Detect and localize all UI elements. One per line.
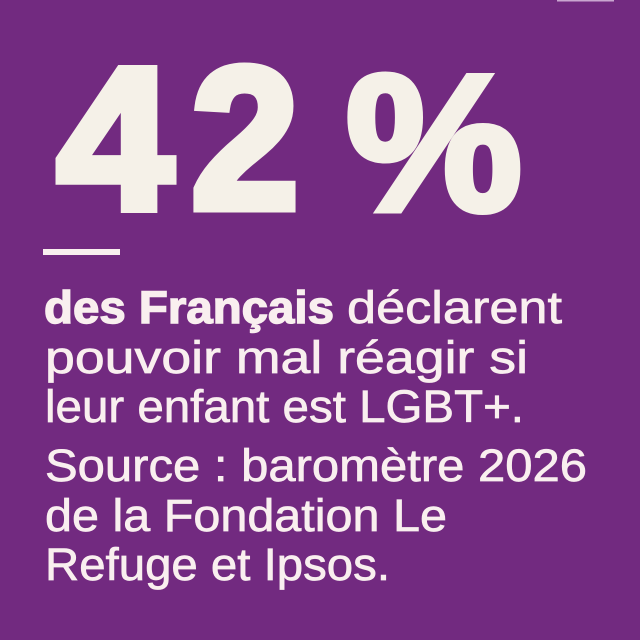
source text: de la Fondation Le — [45, 490, 447, 541]
headline statistic: 42 %: 4 — [57, 26, 173, 252]
statement text — [44, 282, 563, 432]
source text — [45, 440, 587, 590]
statement text: pouvoir mal réagir si — [45, 332, 528, 383]
statement text: leur enfant est LGBT+. — [45, 381, 524, 432]
statement text: déclarent — [347, 282, 563, 333]
source text: Source : baromètre 2026 — [45, 440, 587, 491]
divider rule — [43, 249, 120, 255]
bold lead-in: des Français: des Français — [44, 282, 334, 333]
source text: Refuge et Ipsos. — [45, 539, 390, 590]
headline statistic: 42 %: 2 — [191, 25, 299, 251]
headline statistic: 42 %: % — [346, 35, 522, 252]
headline statistic: 42 % — [57, 25, 522, 252]
